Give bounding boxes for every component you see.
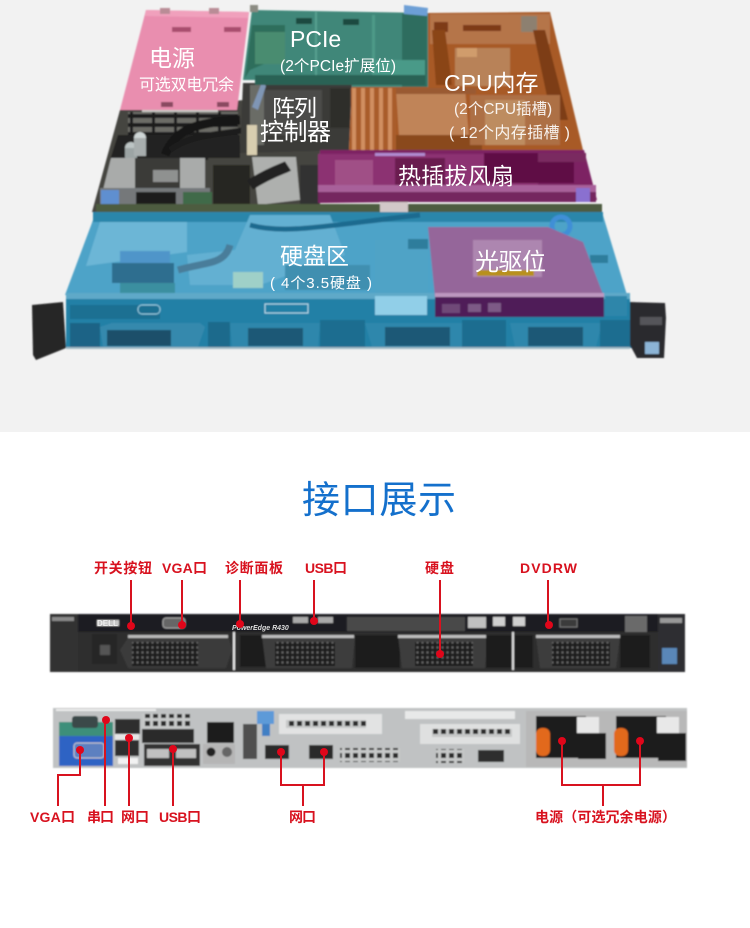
label: 热插拔风扇: 热插拔风扇 xyxy=(398,163,514,189)
callout: 开关按钮 xyxy=(94,560,152,630)
rear panel server xyxy=(53,708,687,768)
front panel server xyxy=(50,614,685,672)
label: 硬盘区: 硬盘区 xyxy=(280,243,349,269)
background: top panel xyxy=(0,0,750,432)
callout: USB口 xyxy=(159,745,201,825)
label: 阵列: 阵列 xyxy=(272,95,317,121)
zone: chassis interior xyxy=(92,100,602,213)
callout: 网口 xyxy=(121,734,149,825)
rear callouts xyxy=(30,716,676,825)
callout: 开关按钮: 开关按钮 xyxy=(94,560,152,576)
callout: 网口 pair xyxy=(277,748,328,825)
zone: optical drive xyxy=(428,227,604,317)
title: 接口展示 xyxy=(302,480,456,522)
diagnostic text on bezel: PowerEdge R430 xyxy=(232,625,289,632)
label: 12个内存插槽: ( 12个内存插槽 ) xyxy=(449,124,570,142)
callout: 串口: 串口 xyxy=(87,809,114,825)
zone: CPU and memory xyxy=(349,12,583,150)
front callouts xyxy=(94,560,578,658)
label: 2个PCIe扩展位: (2个PCIe扩展位) xyxy=(280,57,396,75)
label: 控制器: 控制器 xyxy=(260,119,331,146)
label: 4个3.5硬盘: ( 4个3.5硬盘 ) xyxy=(270,274,372,292)
zone: drive bay xyxy=(65,212,632,349)
callout: VGA口 xyxy=(162,560,207,629)
label: PCIe: PCIe xyxy=(290,26,341,52)
callout: 电源（可选冗余电源）: 电源（可选冗余电源） xyxy=(535,809,676,825)
left rack ear xyxy=(32,302,66,360)
logo: DELL xyxy=(97,619,118,628)
callout: USB口: USB口 xyxy=(159,809,201,825)
callout: 串口 xyxy=(87,716,114,825)
right rack ear xyxy=(630,302,666,358)
callout: VGA口: VGA口 xyxy=(30,809,75,825)
server photo with colour zones xyxy=(32,5,666,360)
zone: PCIe xyxy=(243,5,428,88)
callout: 网口 pair: 网口 xyxy=(289,809,316,825)
label: 2个CPU插槽: (2个CPU插槽) xyxy=(454,100,552,118)
callout: DVDRW xyxy=(520,560,578,629)
label: 电源: 电源 xyxy=(149,45,195,71)
zone: array controller overlay xyxy=(240,82,352,155)
zone: hot-swap fans xyxy=(318,150,597,212)
label: 光驱位: 光驱位 xyxy=(475,249,546,276)
callout: 诊断面板 xyxy=(225,560,283,628)
label: CPU内存: CPU内存 xyxy=(444,70,539,96)
callout: 硬盘 xyxy=(425,560,454,658)
callout: 诊断面板: 诊断面板 xyxy=(225,560,283,576)
callout: 硬盘: 硬盘 xyxy=(425,560,454,576)
callout: USB口: USB口 xyxy=(305,560,347,576)
callout: 网口: 网口 xyxy=(121,809,149,825)
callout: VGA口 xyxy=(30,746,84,825)
label: 可选双电冗余: 可选双电冗余 xyxy=(139,75,234,94)
callout: DVDRW: DVDRW xyxy=(520,560,578,576)
callout: USB口 xyxy=(305,560,347,625)
callout: VGA口: VGA口 xyxy=(162,560,207,576)
callout: 电源（可选冗余电源） xyxy=(535,737,676,825)
zone: power supply xyxy=(120,8,249,112)
